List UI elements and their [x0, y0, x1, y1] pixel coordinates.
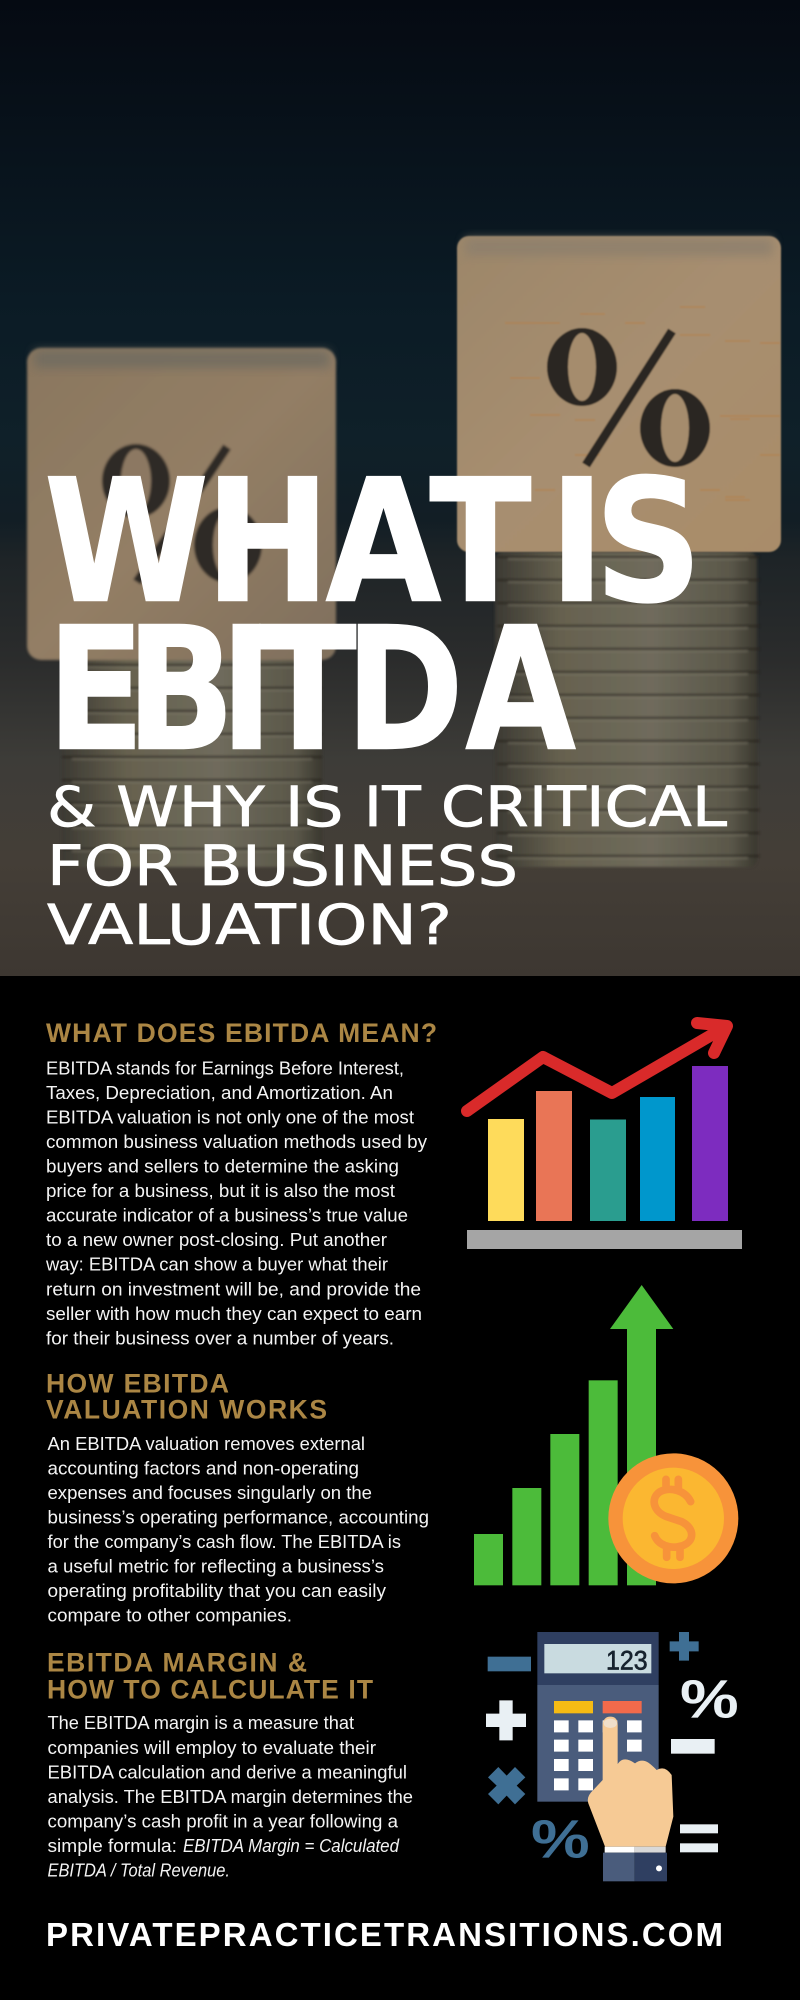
- icon: colourful bar chart with red arrow: [467, 1023, 742, 1249]
- text block: EBITDA margin: EBITDA calculation and derive a meaningful: [48, 1761, 407, 1782]
- heading: how EBITDA valuation works: VALUATION WORKS: [46, 1394, 327, 1424]
- icon: calculator with pointing hand: 123: [606, 1645, 648, 1675]
- text block: EBITDA definition: common business valuation methods used by: [46, 1131, 428, 1152]
- text block: how valuation works: [48, 1433, 429, 1626]
- text block: EBITDA margin: The EBITDA margin is a measure that: [48, 1712, 354, 1733]
- text block: how valuation works: accounting factors and non-operating: [48, 1458, 359, 1479]
- text block: EBITDA definition: for their business over a number of years.: [46, 1327, 394, 1348]
- heading: EBITDA margin: [47, 1648, 373, 1704]
- text block: EBITDA margin: EBITDA Margin = Calculated: [183, 1835, 400, 1856]
- icon: calculator with pointing hand: %: [680, 1670, 739, 1729]
- footer website: PRIVATEPRACTICETRANSITIONS.COM: [46, 1916, 723, 1953]
- text block: EBITDA margin: EBITDA / Total Revenue.: [48, 1860, 230, 1880]
- subtitle: [47, 775, 727, 957]
- text block: how valuation works: business’s operating performance, accounting: [48, 1506, 429, 1528]
- text block: how valuation works: An EBITDA valuation removes external: [48, 1433, 365, 1454]
- text block: EBITDA margin: simple formula:: [48, 1835, 177, 1856]
- hero photo: wooden percent blocks on coin stacks: [0, 0, 800, 976]
- text block: how valuation works: compare to other companies.: [48, 1604, 292, 1626]
- subtitle: & WHY IS IT CRITICAL: [47, 775, 727, 839]
- text block: EBITDA margin: company’s cash profit in a year following a: [48, 1810, 399, 1831]
- text block: EBITDA definition: way: EBITDA can show a buyer what their: [45, 1254, 388, 1275]
- text block: EBITDA definition: accurate indicator of a business’s true value: [46, 1205, 408, 1226]
- text block: EBITDA definition: price for a business, but it is also the most: [46, 1180, 395, 1201]
- text block: EBITDA margin: [48, 1712, 413, 1880]
- text block: EBITDA definition: EBITDA valuation is not only one of the most: [46, 1106, 414, 1127]
- heading: what does EBITDA mean: WHAT DOES EBITDA MEAN?: [46, 1018, 437, 1048]
- text block: how valuation works: expenses and focuses singularly on the: [48, 1482, 372, 1503]
- text block: EBITDA definition: [45, 1057, 428, 1348]
- title: [44, 442, 702, 790]
- heading: how EBITDA valuation works: [46, 1369, 327, 1424]
- text block: how valuation works: operating profitability that you can easily: [48, 1580, 387, 1601]
- icon: calculator with pointing hand: %: [531, 1810, 590, 1869]
- title: EBITDA: [47, 591, 576, 790]
- subtitle: FOR BUSINESS: [47, 834, 518, 898]
- subtitle: VALUATION?: [47, 893, 452, 957]
- text block: EBITDA definition: return on investment will be, and provide the: [46, 1278, 421, 1299]
- text block: how valuation works: for the company’s cash flow. The EBITDA is: [48, 1531, 401, 1552]
- text block: EBITDA margin: analysis. The EBITDA margin determines the: [48, 1786, 413, 1807]
- heading: how EBITDA valuation works: HOW EBITDA: [46, 1369, 229, 1399]
- title: WHAT IS: [44, 442, 702, 641]
- heading: EBITDA margin: EBITDA MARGIN &: [47, 1648, 307, 1678]
- heading: EBITDA margin: HOW TO CALCULATE IT: [47, 1674, 373, 1704]
- icon: calculator with pointing hand: [486, 1632, 739, 1881]
- text block: EBITDA definition: to a new owner post-closing. Put another: [46, 1229, 387, 1250]
- text block: how valuation works: a useful metric for reflecting a business’s: [48, 1556, 384, 1576]
- text block: EBITDA definition: Taxes, Depreciation, and Amortization. An: [46, 1082, 393, 1103]
- icon: green growth bars with dollar coin: [474, 1285, 738, 1585]
- text block: EBITDA definition: buyers and sellers to determine the asking: [46, 1156, 399, 1176]
- text block: EBITDA definition: EBITDA stands for Earnings Before Interest,: [46, 1057, 404, 1078]
- text block: EBITDA definition: seller with how much they can expect to earn: [46, 1303, 422, 1324]
- text block: EBITDA margin: companies will employ to evaluate their: [48, 1737, 376, 1758]
